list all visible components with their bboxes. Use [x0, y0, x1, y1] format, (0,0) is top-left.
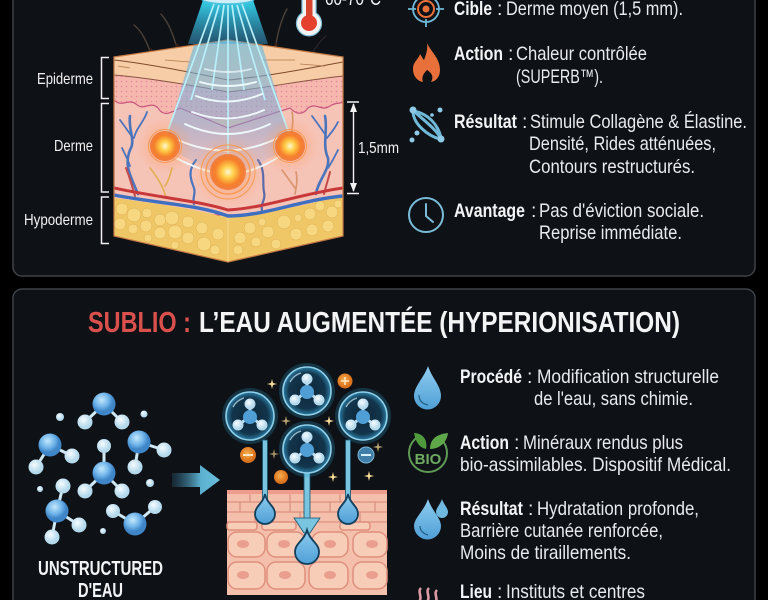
- text: Avantage: Pas d'éviction sociale.: [539, 200, 704, 222]
- dermis vessels: [120, 112, 338, 210]
- text: Procédé: :: [527, 366, 532, 388]
- text: Résultat: Moins de tiraillements.: [460, 542, 631, 564]
- text: Résultat: [460, 498, 699, 564]
- text: Résultat: Barrière cutanée renforcée,: [460, 520, 663, 542]
- heading: [88, 305, 680, 339]
- skin cross-section illustration: [110, 9, 350, 266]
- icon: water drop: [414, 366, 441, 410]
- icon: bio badge: BIO: [415, 451, 442, 468]
- hairs: [134, 9, 326, 58]
- text: Action: :: [514, 432, 519, 454]
- text: Action: (SUPERB™).: [516, 66, 603, 88]
- text: Avantage: :: [531, 200, 536, 222]
- stems and droplets penetrating skin: [255, 440, 358, 564]
- text: Résultat: Hydratation profonde,: [537, 498, 699, 520]
- vessel band: [114, 188, 343, 210]
- text: Action: bio-assimilables. Dispositif Médical.: [460, 454, 731, 476]
- layer labels: Epiderme: [37, 71, 93, 88]
- icon: target: [408, 0, 444, 27]
- block outline: [114, 40, 343, 262]
- text: Procédé: Procédé: [460, 366, 522, 388]
- layer brackets: [102, 58, 109, 244]
- text: Cible: [454, 0, 683, 20]
- icon: flame: [413, 43, 440, 82]
- text: Résultat: Densité, Rides atténuées,: [529, 133, 716, 155]
- depth arrow 1.5 mm: [347, 102, 399, 194]
- ultrasound beam and transducer: [166, 0, 290, 172]
- text: Résultat: Contours restructurés.: [529, 156, 695, 178]
- icon: steam: [419, 588, 437, 600]
- icon: clock: [409, 198, 443, 232]
- text: Action: :: [508, 43, 513, 65]
- ions and sparkles: [240, 374, 383, 484]
- text: Résultat: :: [528, 498, 533, 520]
- text: Résultat: Résultat: [460, 498, 523, 520]
- heading: SUBLIO :: [88, 307, 191, 339]
- text: Résultat: :: [522, 111, 527, 133]
- text: Lieu: [460, 581, 645, 600]
- layer labels: [24, 71, 93, 229]
- layer labels: Hypoderme: [24, 212, 93, 229]
- text: Action: Action: [454, 43, 503, 65]
- icon: bio badge: [409, 432, 448, 472]
- fat layer: [114, 196, 343, 266]
- text: Résultat: Résultat: [454, 111, 517, 133]
- depth arrow 1.5 mm: 1,5mm: [358, 140, 399, 157]
- skin tissue with cells: [227, 490, 387, 595]
- beam overlay on skin: [168, 40, 288, 170]
- skin block layers: [110, 36, 350, 266]
- panel: Sublio hyperionised water: [13, 289, 755, 600]
- focal heat points: [137, 118, 318, 208]
- caption: [38, 558, 163, 600]
- text: Avantage: Avantage: [454, 200, 525, 222]
- icon: collagen fibre: [410, 106, 444, 142]
- panel: Sublime radiofrequency: [13, 0, 755, 276]
- heading: L’EAU AUGMENTÉE (HYPERIONISATION): [199, 305, 680, 339]
- caption: UNSTRUCTURED: [38, 558, 163, 580]
- text: Procédé: Modification structurelle: [537, 366, 719, 388]
- text: Procédé: [460, 366, 719, 410]
- text: Action: Chaleur contrôlée: [516, 43, 647, 65]
- icon: two drops: [414, 499, 448, 540]
- thermometer icon: [296, 0, 322, 36]
- text: Procédé: de l'eau, sans chimie.: [534, 388, 693, 410]
- text: Action: Action: [460, 432, 509, 454]
- transformation arrow: [172, 465, 220, 495]
- structured water bubbles: [222, 363, 391, 477]
- layer labels: Derme: [54, 138, 93, 155]
- text: Résultat: [454, 110, 747, 178]
- text: Avantage: Reprise immédiate.: [539, 222, 682, 244]
- text: Action: [454, 43, 647, 88]
- unstructured water molecules: [28, 392, 172, 544]
- text: Action: Minéraux rendus plus: [523, 432, 683, 454]
- text: Action: [460, 432, 731, 476]
- text: Avantage: [454, 200, 704, 244]
